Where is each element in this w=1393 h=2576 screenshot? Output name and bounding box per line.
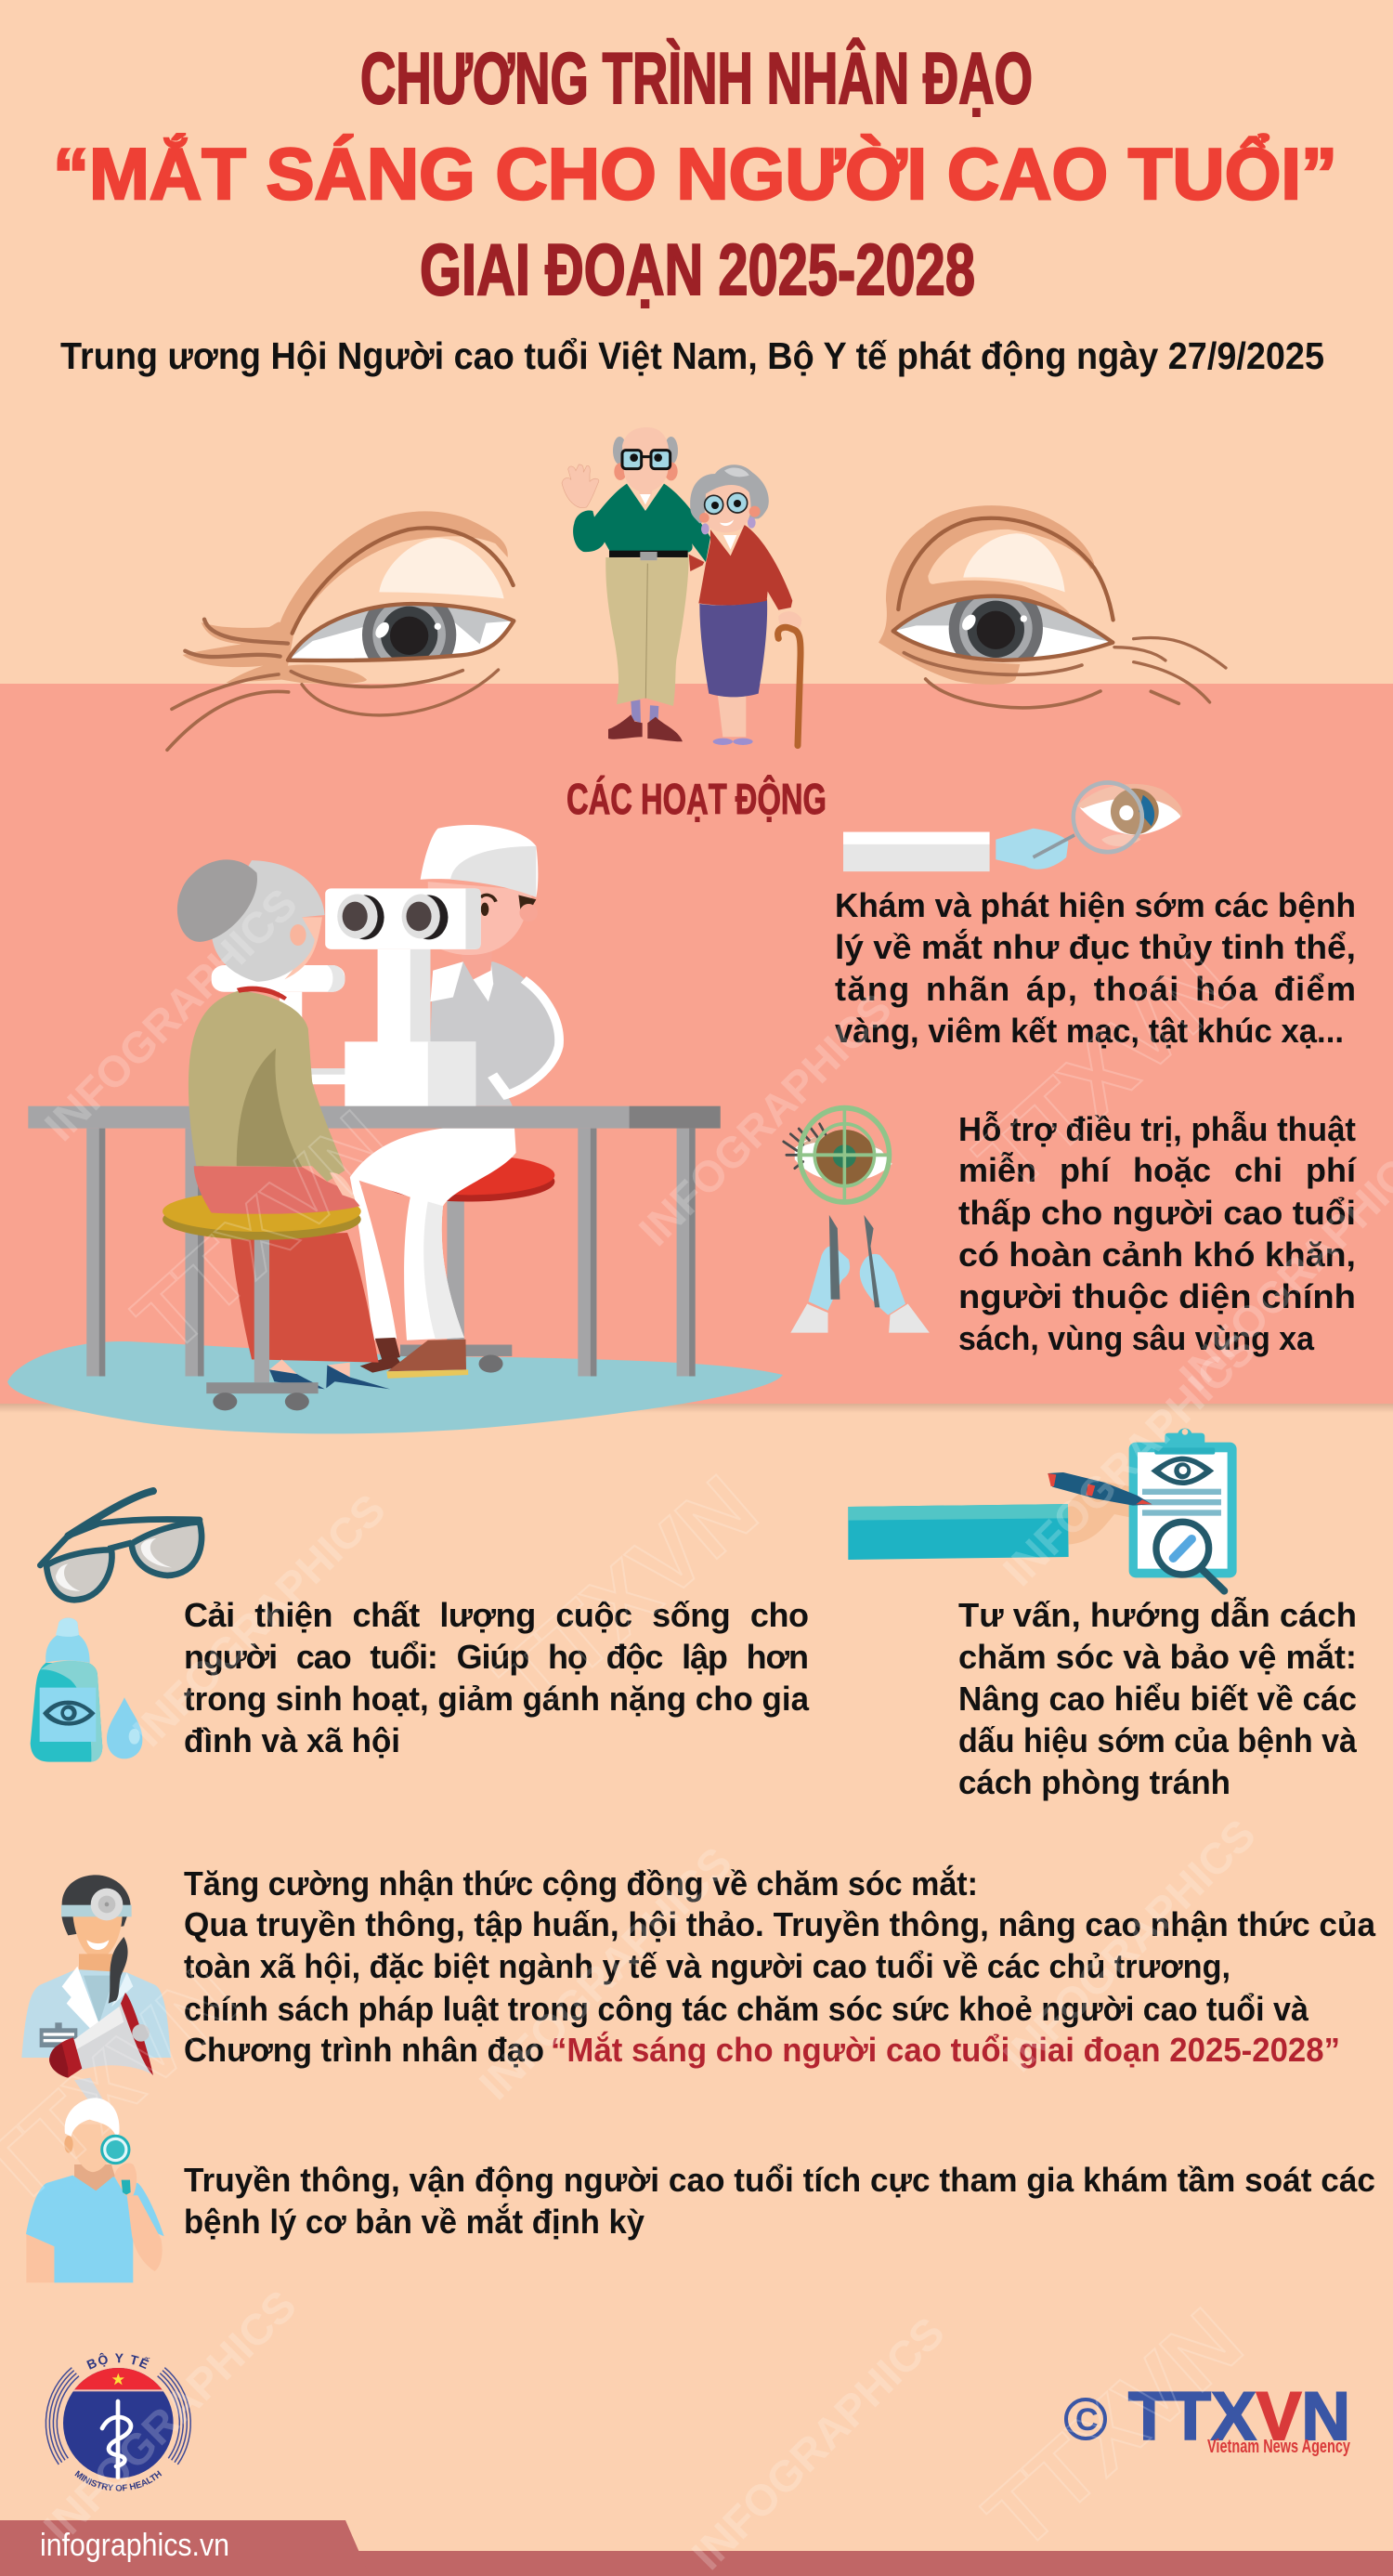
text: consultation: cách phòng tránh [958,1763,1230,1801]
icon: glasses [40,1491,202,1600]
text: outreach: Truyền thông, vận động người cao tuổi tích cực tham gia khám tầm soát các [184,2161,1375,2199]
text: INFOGRAPHICS [994,1324,1265,1595]
icon: doctor with megaphone [21,1875,171,2102]
text: raising awareness: Chương trình nhân đạo [184,2031,544,2069]
text: outreach: bệnh lý cơ bản về mắt định kỳ [184,2202,644,2241]
icon: elderly man with magnifier [26,2098,164,2282]
text: INFOGRAPHICS [35,879,306,1150]
slit lamp machine [212,888,481,1106]
illustration: right eye [879,505,1226,708]
logo: Ministry of Health [45,2352,191,2491]
title [53,37,1337,310]
text: consultation: Tư vấn, hướng dẫn cách [958,1596,1357,1634]
text: consultation [958,1596,1358,1801]
floor [7,1341,783,1433]
subtitle: Trung ương Hội Người cao tuổi Việt Nam, Bộ Y tế phát động ngày 27/9/2025 [60,334,1324,377]
text: early detection: tăng nhãn áp, thoái hóa điểm [835,970,1356,1008]
illustration: left eye [167,511,514,750]
text: raising awareness: Tăng cường nhận thức cộng đồng về chăm sóc mắt: [184,1863,978,1903]
text: TTXVN [966,2289,1261,2569]
text: TTXVN [957,932,1252,1212]
text: treatment support: sách, vùng sâu vùng xa [958,1319,1315,1357]
text: quality of life: đình và xã hội [184,1721,400,1759]
woman [689,464,801,746]
illustration: elderly couple [562,427,801,746]
heading: activities: CÁC HOẠT ĐỘNG [566,775,827,823]
doctor stool [382,1155,554,1373]
doctor [350,825,562,1379]
text: treatment support: thấp cho người cao tuổi [958,1194,1356,1232]
table top [28,1106,630,1129]
text: consultation: dấu hiệu sớm của bệnh và [958,1721,1358,1759]
logo: Ministry of Health: BỘ Y TẾ [86,2352,150,2370]
text: TTXVN [478,1456,776,1734]
text: raising awareness: Qua truyền thông, tập huấn, hội thảo. Truyền thông, nâng cao nhận thức của [184,1905,1376,1943]
icon: eye drop bottle [31,1618,142,1762]
logo: TTXVN: TTXVN [1128,2379,1350,2454]
text: INFOGRAPHICS [470,1837,741,2109]
text: outreach [184,2161,1375,2241]
title: CHƯƠNG TRÌNH NHÂN ĐẠO [360,37,1033,119]
text: treatment support: Hỗ trợ điều trị, phẫu thuật [958,1110,1356,1148]
text: early detection: Khám và phát hiện sớm các bệnh [835,886,1356,924]
text: raising awareness [184,1863,1376,2069]
text: early detection: lý về mắt như đục thủy tinh thể, [835,927,1356,966]
text: INFOGRAPHICS [34,2281,306,2552]
footer [0,2520,1393,2576]
text: consultation: Nâng cao hiểu biết về các [958,1680,1357,1718]
man [562,427,710,741]
text: treatment support [958,1110,1357,1357]
footer: infographics.vn [40,2528,229,2563]
illustration: eye examination scene [7,825,783,1433]
text: TTXVN [115,1092,410,1372]
icon: eye target and surgical tools [784,1108,930,1333]
table legs [86,1129,696,1376]
text: INFOGRAPHICS [630,984,901,1255]
title: “MẮT SÁNG CHO NGƯỜI CAO TUỔI” [53,133,1337,215]
text: quality of life [184,1596,810,1759]
icon: clipboard with hand and pen [848,1428,1237,1591]
text: treatment support: có hoàn cảnh khó khăn, [958,1236,1356,1274]
title: GIAI ĐOẠN 2025-2028 [420,229,975,310]
panel: activities band [0,684,1393,1413]
text: consultation: chăm sóc và bảo vệ mắt: [958,1637,1357,1676]
text: treatment support: miễn phí hoặc chi phí [958,1151,1357,1189]
text: quality of life: Cải thiện chất lượng cuộc sống cho [184,1596,809,1634]
text: quality of life: người cao tuổi: Giúp họ độc lập hơn [184,1638,809,1676]
text: raising awareness: chính sách pháp luật trong công tác chăm sóc sức khoẻ người cao tuổi và [184,1990,1309,2028]
text: raising awareness: “Mắt sáng cho người cao tuổi giai đoạn 2025-2028” [551,2030,1340,2069]
patient [163,859,390,1410]
text: early detection [835,886,1356,1050]
text: INFOGRAPHICS [683,2308,954,2576]
text: quality of life: trong sinh hoạt, giảm gánh nặng cho gia [184,1680,810,1718]
text: treatment support: người thuộc diện chính [958,1277,1356,1315]
text: INFOGRAPHICS [994,1810,1265,2081]
icon: gloved hand holding magnifier over eye [843,782,1182,871]
text: INFOGRAPHICS [124,1484,395,1756]
text: early detection: vàng, viêm kết mạc, tật khúc xạ... [835,1012,1344,1050]
text: raising awareness: toàn xã hội, đặc biệt ngành y tế và người cao tuổi về các chủ trương, [184,1947,1230,1985]
logo: Ministry of Health: MINISTRY OF HEALTH [74,2470,162,2491]
logo: TTXVN: C [1075,2402,1099,2438]
